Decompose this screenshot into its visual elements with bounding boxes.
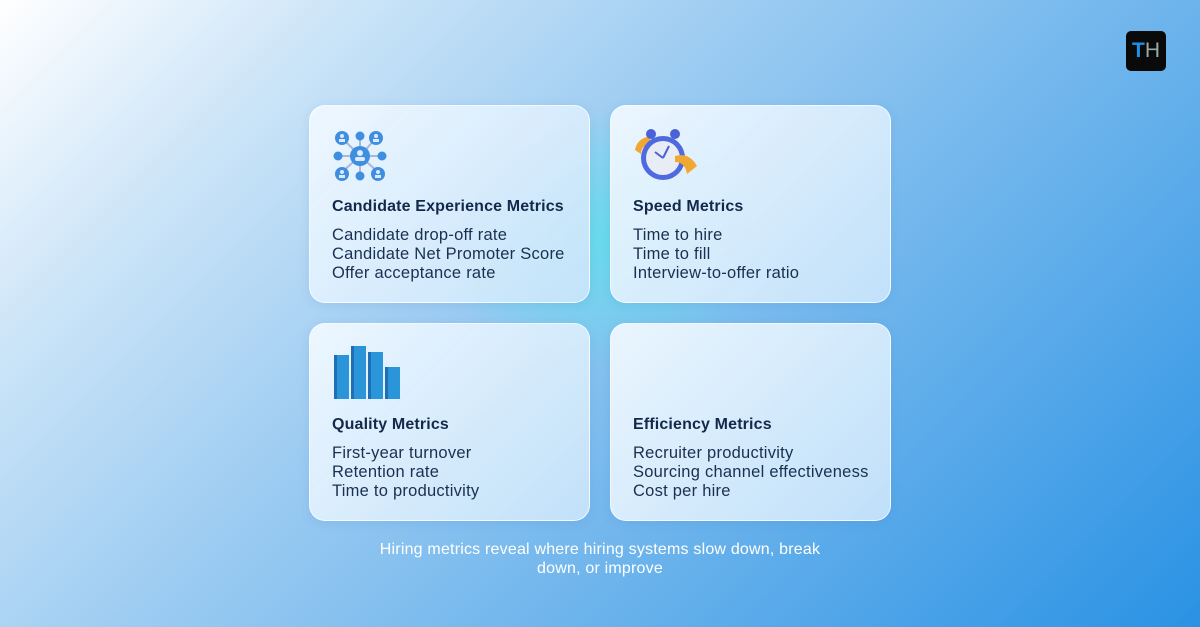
panel: speed	[610, 105, 891, 303]
list: Candidate drop-off rate	[332, 226, 507, 244]
icon: bar chart	[334, 346, 400, 399]
list: Recruiter productivity	[633, 444, 793, 462]
list	[332, 226, 565, 282]
list	[332, 444, 479, 500]
list: Cost per hire	[633, 482, 731, 500]
list: Sourcing channel effectiveness	[633, 463, 869, 481]
icon: network	[334, 131, 386, 181]
list: Time to productivity	[332, 482, 479, 500]
list: Interview-to-offer ratio	[633, 264, 799, 282]
list	[633, 444, 869, 500]
heading: Candidate Experience Metrics	[332, 198, 564, 215]
panel: quality	[309, 323, 590, 521]
logo	[1126, 31, 1166, 71]
list: Candidate Net Promoter Score	[332, 245, 565, 263]
list: Time to hire	[633, 226, 722, 244]
panel: candidate experience	[309, 105, 590, 303]
list	[633, 226, 799, 282]
list: Offer acceptance rate	[332, 264, 496, 282]
list: Time to fill	[633, 245, 711, 263]
icon: clock	[635, 129, 697, 180]
footer caption: Hiring metrics reveal where hiring systems slow down, break down, or improve	[380, 541, 820, 577]
list: First-year turnover	[332, 444, 472, 462]
logo: TH	[1132, 39, 1160, 62]
list: Retention rate	[332, 463, 439, 481]
heading: Quality Metrics	[332, 416, 449, 433]
heading: Speed Metrics	[633, 198, 743, 215]
panel: efficiency	[610, 323, 891, 521]
heading: Efficiency Metrics	[633, 416, 772, 433]
